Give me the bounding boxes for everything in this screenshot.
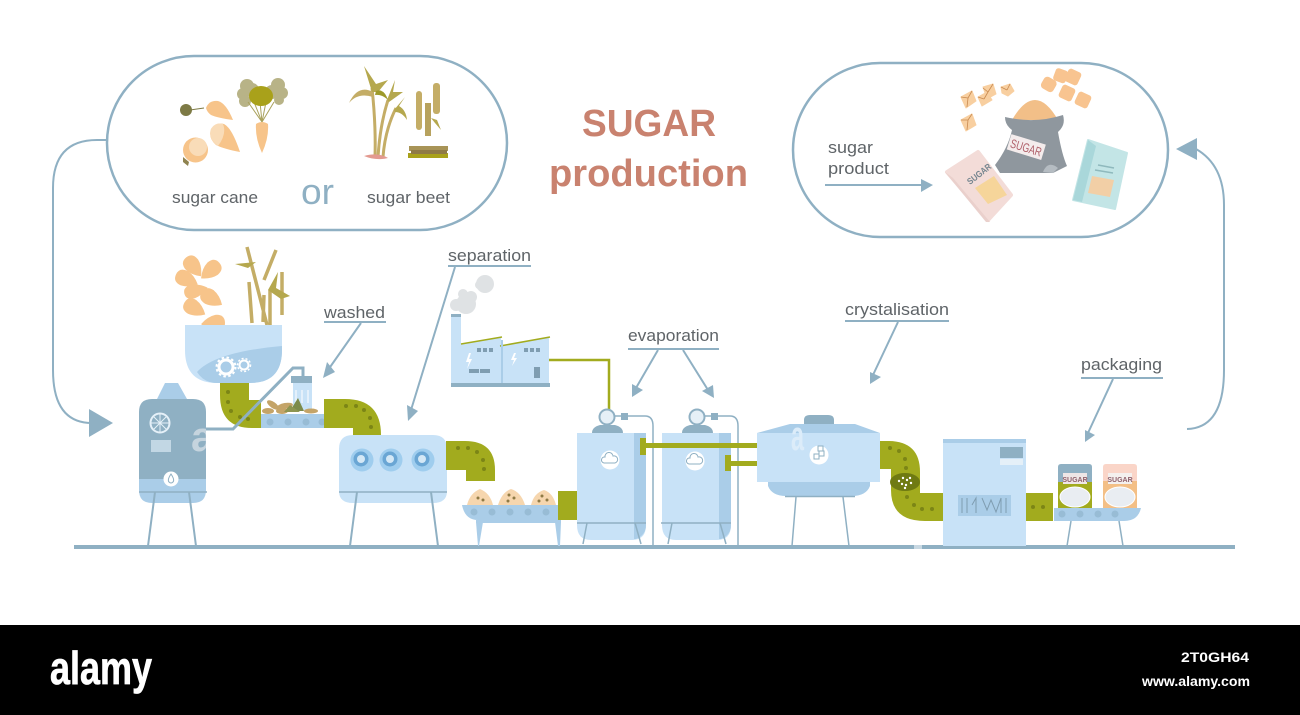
icon: sugar cane [349,66,448,159]
machine: hopper [185,325,282,383]
arrow: loop into process [53,140,113,437]
machine: crystaliser [757,412,880,546]
title: SUGAR [582,103,716,145]
green pipe: separator to tray [446,441,495,481]
label: sugar beet: sugar beet [367,189,450,207]
icon: gears [216,358,250,376]
label: crystalisation [845,301,949,384]
machine: crystaliser: a [791,412,804,459]
machine: boiler: a [191,413,215,460]
washed produce on tray [261,398,326,428]
label: evaporation: evaporation [628,327,719,345]
icon: sugar sack: SUGAR [1009,137,1043,159]
icon: pink sugar bag [945,152,1011,222]
sugar bags on conveyor [1058,464,1137,508]
sugar bags on conveyor: SUGAR [1107,477,1133,484]
image id: 2T0GH64 [1181,649,1249,665]
green pipe: hopper to washer [220,383,261,428]
label: packaging [1081,356,1163,442]
machine: packer [943,439,1026,546]
label: sugar product: sugar [828,139,874,157]
label: evaporation [628,327,719,398]
label: sugar cane: sugar cane [172,189,258,207]
tank: second evaporator [661,410,738,546]
icon: blue sugar bag [1073,140,1127,209]
icon: sugar sack [995,100,1067,173]
label: separation: separation [448,247,531,265]
label: crystalisation: crystalisation [845,301,949,319]
title: production [549,153,748,195]
label: washed: washed [323,304,385,322]
power wire [549,360,609,410]
pulp piles on conveyor [462,489,577,546]
footer bar [0,625,1300,715]
green pipe: washer to separator [324,399,381,435]
website: www.alamy.com [1141,673,1250,689]
label: or: or [301,171,334,212]
green connector: packer to conveyor [1026,493,1053,521]
water pipe and shower [206,368,312,429]
label: washed [323,304,386,378]
arrow: to products [825,179,933,192]
arrow: loop to products [1176,138,1224,429]
panel: sugar product [793,63,1168,237]
machine: boiler [139,383,207,545]
tank: first evaporator [577,410,653,546]
icon: sugar cubes [961,67,1092,131]
icon: sugar beets [180,78,288,166]
alamy logo: alamy [50,642,152,694]
green pipe: crystaliser to packer [880,441,943,521]
sugar bags on conveyor: SUGAR [1062,477,1088,484]
label: sugar product [828,139,889,178]
ground line [74,545,1235,549]
green connectors between tanks [640,438,758,471]
factory with smoke [450,275,550,387]
hopper produce [173,247,290,332]
machine: separator [339,435,447,546]
label: packaging: packaging [1081,356,1162,374]
conveyor: packaging [1054,508,1141,546]
label: sugar product: product [828,160,889,178]
title [549,103,748,195]
icon: pink sugar bag: SUGAR [965,161,994,187]
panel: raw materials [107,56,507,230]
label: separation [407,247,531,421]
